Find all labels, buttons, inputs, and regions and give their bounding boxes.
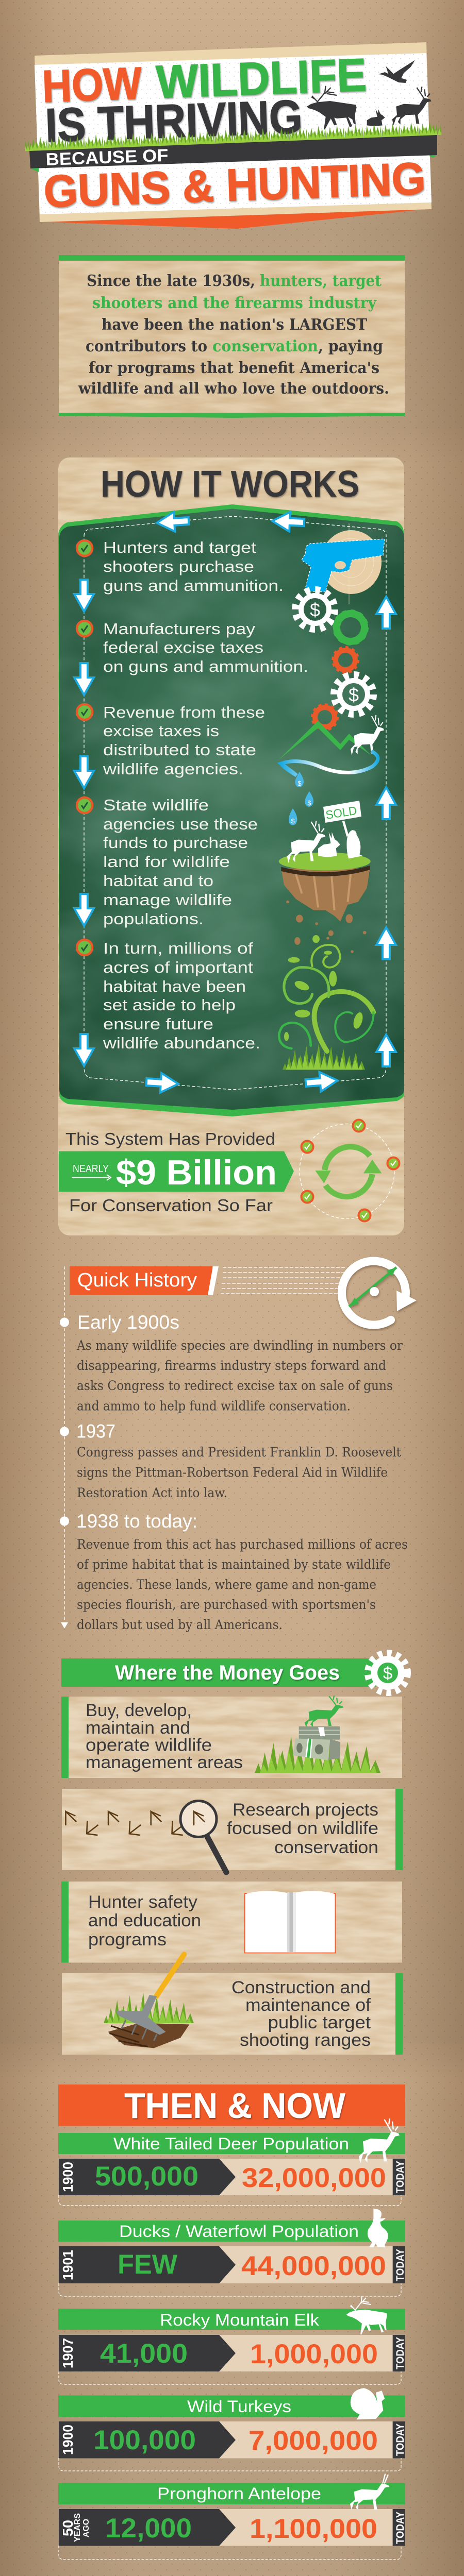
row: turkeys: TODAY [394, 2424, 406, 2456]
entry: early 1900s: and ammo to help fund wildlife conservation. [77, 1398, 351, 1414]
icon: antelope [350, 2474, 389, 2510]
icon: target [314, 523, 388, 604]
row: turkeys: 100,000 [93, 2425, 196, 2455]
entry: 1938 to today: species flourish, are purchased with sportsmen's [77, 1597, 376, 1612]
step 3 text: excise taxes is [103, 722, 219, 740]
icon: sold sign: SOLD [325, 804, 358, 822]
icon: magnifier [180, 1801, 226, 1872]
entry: early 1900s: Early 1900s [77, 1312, 179, 1333]
row: white tailed deer: 1900 [60, 2162, 76, 2192]
system has provided [59, 1129, 294, 1215]
row: turkeys: 7,000,000 [248, 2426, 378, 2456]
row: elk: Rocky Mountain Elk [160, 2311, 320, 2329]
row: elk [58, 2296, 406, 2384]
timeline [64, 1266, 65, 1622]
intro copy: contributors to [86, 337, 207, 355]
entry: 1938 to today: dollars but used by all Americans. [77, 1617, 283, 1632]
card 2: focused on wildlife [227, 1819, 378, 1838]
icon: mountain [278, 721, 371, 760]
row: elk: 1907 [60, 2338, 76, 2368]
intro copy: , paying [318, 337, 383, 355]
icon: deer [359, 2119, 400, 2163]
intro text box [59, 255, 405, 418]
title words [41, 49, 426, 217]
icon: orange gear [334, 649, 357, 671]
entry: 1938 to today: Revenue from this act has purchased millions of acres [77, 1537, 408, 1552]
row: pronghorn: AGO [82, 2519, 91, 2537]
amount: $9 Billion [116, 1153, 277, 1192]
icon: grass [104, 1993, 194, 2023]
card 4: public target [268, 2013, 371, 2032]
card 3: Hunter safety [88, 1892, 197, 1912]
heading bar [61, 1658, 376, 1687]
then and now: THEN & NOW [124, 2086, 345, 2126]
then and now [58, 2084, 406, 2560]
green banner [59, 1151, 294, 1192]
card 1: operate wildlife [86, 1735, 212, 1755]
row: white tailed deer: 500,000 [95, 2161, 198, 2192]
route arrows [74, 511, 396, 1094]
line above: This System Has Provided [65, 1129, 275, 1148]
green frame [58, 504, 404, 1116]
icon: dollar gear [297, 591, 333, 628]
step 4 text: populations. [103, 910, 204, 928]
row: ducks [58, 2209, 406, 2296]
row: turkeys [58, 2388, 406, 2471]
intro copy: hunters, target [260, 272, 382, 290]
step 5 text: habitat have been [103, 977, 246, 995]
row: white tailed deer: 32,000,000 [242, 2163, 386, 2193]
step 5 text: acres of important [103, 958, 253, 976]
icon: floating island [279, 821, 371, 953]
step 1 text: shooters purchase [103, 557, 254, 575]
nearly: NEARLY [73, 1163, 109, 1175]
elk [307, 86, 357, 130]
panel: how it works [58, 457, 404, 1235]
chalkboard [59, 509, 404, 1110]
card 1 [61, 1696, 402, 1778]
intro copy: shooters and the firearms industry [92, 294, 377, 312]
icon: money drops [289, 772, 313, 825]
icon: turkey [351, 2388, 385, 2419]
row: ducks: FEW [118, 2249, 177, 2280]
icon: elk [346, 2296, 387, 2335]
row: pronghorn: YEARS [73, 2513, 82, 2542]
heading: HOW IT WORKS [101, 464, 359, 505]
title board [25, 42, 441, 229]
step 4 text [103, 796, 258, 928]
step 1 text: Hunters and target [103, 538, 256, 556]
card 4: shooting ranges [240, 2030, 371, 2050]
entry: 1937: 1937 [76, 1421, 115, 1442]
heading bar [70, 1266, 212, 1295]
card 2: Research projects [233, 1800, 378, 1820]
step 5 text: wildlife abundance. [103, 1034, 260, 1052]
row: turkeys: 1900 [60, 2425, 76, 2455]
entry: early 1900s: disappearing, firearms industry steps forward and [77, 1358, 386, 1373]
step 5 text: set aside to help [103, 996, 236, 1014]
card 1: Buy, develop, [86, 1701, 192, 1720]
icon: money drops: $ [297, 779, 302, 787]
step 2 text [103, 620, 308, 675]
step 3 text: Revenue from these [103, 703, 265, 721]
icon: vine [279, 935, 373, 1052]
card 2 [62, 1789, 403, 1872]
card 3: and education [88, 1911, 201, 1930]
icon: rake [108, 1954, 189, 2048]
step 2 text: federal excise taxes [103, 638, 263, 656]
row: white tailed deer [58, 2119, 406, 2206]
banner orange tail [49, 209, 432, 229]
card 2: conservation [274, 1838, 378, 1857]
green rules [59, 255, 405, 261]
icon: clock arrow [342, 1261, 417, 1325]
entry: early 1900s: As many wildlife species are dwindling in numbers or [76, 1338, 403, 1353]
step 5 text: ensure future [103, 1015, 213, 1033]
entry: 1937 [60, 1421, 401, 1500]
step 4 text: land for wildlife [103, 853, 230, 871]
row: white tailed deer: White Tailed Deer Population [113, 2134, 349, 2153]
row: pronghorn: TODAY [394, 2512, 406, 2544]
where the money goes [61, 1654, 406, 2055]
icon: recycle cycle [300, 1120, 399, 1221]
entry: 1938 to today: 1938 to today: [76, 1511, 197, 1532]
grass [25, 121, 441, 152]
step checks [77, 540, 92, 955]
intro copy: wildlife and all who love the outdoors. [78, 380, 389, 398]
row: pronghorn: 50 [60, 2520, 76, 2536]
dark band [29, 135, 437, 168]
icon: pistol [302, 539, 385, 592]
intro copy [78, 272, 389, 398]
dashed route [84, 516, 386, 1090]
icon: money drops: $ [307, 799, 311, 807]
row: elk: 41,000 [100, 2338, 188, 2369]
entry: early 1900s: asks Congress to redirect excise tax on sale of guns [77, 1378, 393, 1393]
row: pronghorn: Pronghorn Antelope [157, 2484, 321, 2503]
entry: 1937: Congress passes and President Franklin D. Roosevelt [77, 1445, 401, 1460]
step 4 text: manage wildlife [103, 891, 232, 909]
intro copy: conservation [212, 337, 318, 355]
card 1: maintain and [86, 1718, 190, 1738]
row: ducks: 44,000,000 [241, 2251, 386, 2281]
icon: money stacks [293, 1726, 340, 1760]
heading [58, 2084, 405, 2126]
paper card [58, 457, 404, 1235]
card 4: Construction and [231, 1978, 371, 1997]
icon: duck [368, 2209, 388, 2247]
card 3 [61, 1882, 402, 1963]
step 1 text [103, 538, 284, 595]
icon: orange gear 2 [313, 706, 336, 728]
intro copy: for programs that benefit America's [89, 359, 379, 377]
deer [392, 87, 432, 125]
icon: dollar gear 2: $ [349, 684, 359, 705]
step 4 text: habitat and to [103, 872, 213, 890]
row: ducks: Ducks / Waterfowl Population [119, 2222, 359, 2241]
intro copy: have been the nation's LARGEST [102, 316, 368, 334]
card 4 [62, 1954, 403, 2055]
row: elk: 1,000,000 [250, 2339, 378, 2369]
icon: dollar gear: $ [310, 599, 320, 620]
icon: green gear [336, 613, 366, 642]
row: elk: TODAY [394, 2337, 406, 2369]
icon: money drops: $ [291, 817, 295, 825]
title words: IS THRIVING [44, 91, 303, 152]
paper [59, 255, 405, 416]
step 3 text [103, 703, 265, 778]
entry: 1937: signs the Pittman-Robertson Federal Aid in Wildlife [77, 1465, 388, 1480]
arrow rule [72, 1175, 111, 1180]
step 4 text: agencies use these [103, 815, 258, 833]
line below: For Conservation So Far [69, 1196, 273, 1215]
quick history: Quick History [77, 1269, 197, 1291]
icon: grass tuft [283, 1043, 365, 1070]
step 3 text: distributed to state [103, 741, 256, 759]
icon: dollar gear [369, 1654, 406, 1691]
intro copy: Since the late 1930s, [87, 272, 255, 290]
title words: HOW [41, 57, 143, 112]
title words: GUNS & HUNTING [43, 152, 426, 217]
rabbit [367, 109, 385, 126]
entry: 1938 to today: of prime habitat that is maintained by state wildlife [77, 1557, 391, 1572]
icon: animal tracks [65, 1811, 184, 1835]
step 3 text: wildlife agencies. [103, 760, 243, 778]
entry: 1938 to today: agencies. These lands, where game and non-game [77, 1577, 376, 1592]
row: white tailed deer: TODAY [394, 2161, 406, 2193]
row: turkeys: Wild Turkeys [187, 2397, 291, 2416]
card 4: maintenance of [245, 1995, 371, 2015]
quick history [60, 1261, 417, 1632]
icon: dollar gear: $ [383, 1664, 392, 1683]
step 1 text: guns and ammunition. [103, 577, 284, 595]
icon: dollar gear 2 [336, 676, 372, 713]
step 4 text: State wildlife [103, 796, 209, 814]
card 3: programs [88, 1930, 167, 1950]
row: ducks: 1901 [60, 2250, 76, 2280]
row: pronghorn [58, 2474, 406, 2560]
wood plank [35, 42, 432, 222]
step 5 text: In turn, millions of [103, 939, 253, 957]
row: pronghorn: 1,100,000 [250, 2514, 377, 2544]
where the money goes: Where the Money Goes [115, 1662, 340, 1684]
icon: chalk deer [351, 715, 384, 755]
step 2 text: on guns and ammunition. [103, 657, 308, 675]
icon: open book [245, 1891, 335, 1953]
card 1: management areas [86, 1753, 243, 1772]
icon: river [281, 751, 378, 775]
white panel [35, 53, 432, 214]
because of: BECAUSE OF [45, 146, 169, 170]
row: ducks: TODAY [394, 2249, 406, 2281]
entry: 1937: Restoration Act into law. [77, 1485, 227, 1500]
step 2 text: Manufacturers pay [103, 620, 256, 638]
icon: grass [255, 1733, 380, 1773]
icon: green deer [305, 1696, 343, 1727]
title words: WILDLIFE [155, 49, 367, 108]
step 5 text [103, 939, 260, 1052]
step 4 text: funds to purchase [103, 834, 248, 852]
row: pronghorn: 12,000 [105, 2513, 192, 2544]
entry: 1938 to today [60, 1511, 408, 1632]
flying duck [378, 60, 415, 83]
entry: early 1900s [60, 1312, 403, 1414]
